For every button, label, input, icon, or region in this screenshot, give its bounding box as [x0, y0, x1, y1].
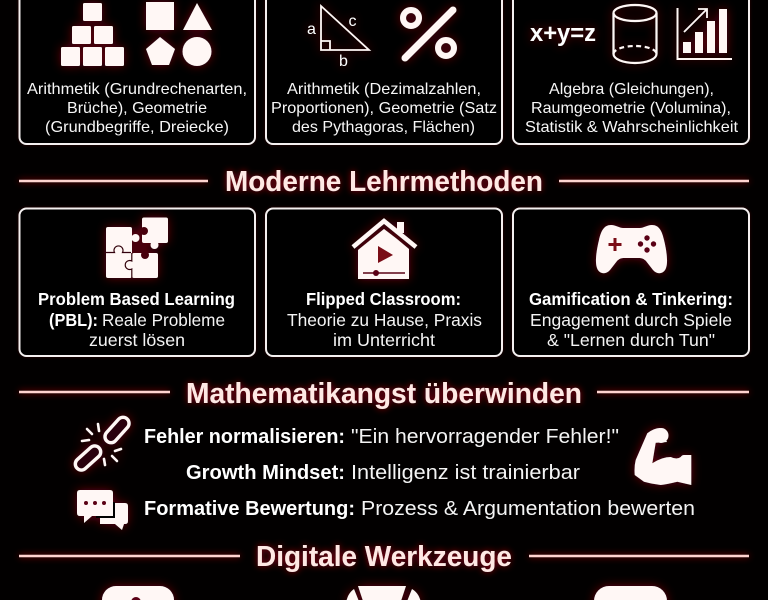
heading: Digitale Werkzeuge: Digitale Werkzeuge: [256, 541, 512, 573]
panel: secondary school topics: [513, 0, 749, 144]
text: Gamification: & "Lernen durch Tun": [547, 330, 715, 350]
panel: Gamification and Tinkering: [513, 208, 749, 356]
text: secondary topics: Algebra (Gleichungen),: [549, 81, 714, 98]
text: Flipped Classroom: Flipped Classroom:: [306, 289, 461, 309]
text: middle school topics: des Pythagoras, Flächen): [292, 119, 475, 136]
text: Formative Bewertung: Prozess & Argumentation bewerten: [361, 497, 695, 520]
text: Growth Mindset: [186, 461, 580, 484]
icon: digital tool right: [594, 586, 667, 600]
icon: puzzle: [106, 218, 168, 278]
icon: house with video: [353, 221, 416, 279]
icon: stacked blocks: [61, 3, 124, 66]
text: Flipped Classroom: Theorie zu Hause, Praxis: [287, 310, 482, 330]
panel: middle school topics: [266, 0, 502, 144]
text: Fehler normalisieren: [144, 425, 619, 448]
text: primary topics: Brüche), Geometrie: [67, 100, 207, 117]
heading: Moderne Lehrmethoden: Moderne Lehrmethoden: [225, 166, 543, 198]
text: primary topics: Arithmetik (Grundrechenarten,: [27, 81, 247, 98]
panel: Flipped Classroom: [266, 208, 502, 356]
text: Formative Bewertung: Formative Bewertung:: [144, 497, 355, 520]
text: Gamification: Engagement durch Spiele: [530, 310, 732, 330]
icon: growth chart: [678, 8, 732, 59]
icon: right triangle: c: [348, 13, 356, 30]
icon: digital tool left: [102, 586, 174, 600]
icon: right triangle: a: [307, 21, 316, 38]
icon: percent sign: [403, 10, 454, 58]
text: primary topics: [27, 81, 247, 136]
icon: right triangle: [307, 6, 369, 70]
text: Growth Mindset: Intelligenz ist trainierbar: [351, 461, 580, 484]
icon: basic shapes: [146, 2, 212, 66]
text: Formative Bewertung: [144, 497, 695, 520]
text: Gamification: Gamification & Tinkering:: [529, 289, 733, 309]
panel: Problem Based Learning: [20, 208, 255, 356]
text: primary topics: (Grundbegriffe, Dreiecke): [45, 119, 229, 136]
icon: digital tool middle: [346, 586, 421, 600]
text: middle school topics: Proportionen), Geometrie (Satz: [271, 100, 497, 117]
icon: flexed arm: [634, 428, 691, 485]
text: PBL: Reale Probleme: [102, 310, 225, 330]
icon: broken chain link: [73, 415, 131, 472]
text: Fehler normalisieren: "Ein hervorragender Fehler!": [351, 425, 619, 448]
text: middle school topics: [271, 81, 497, 136]
heading: Mathematikangst überwinden: Mathematikangst überwinden: [186, 378, 582, 410]
panel: primary school topics: [20, 0, 255, 144]
text: PBL: (PBL):: [49, 310, 98, 330]
icon: game controller: [596, 225, 667, 273]
text: secondary topics: Statistik & Wahrscheinlichkeit: [525, 119, 739, 136]
text: Flipped Classroom: im Unterricht: [333, 330, 435, 350]
text: Flipped Classroom: [287, 289, 482, 350]
icon: right triangle: b: [339, 53, 348, 70]
text: Gamification: [529, 289, 733, 350]
icon: equation: x+y=z: [530, 20, 596, 47]
text: Fehler normalisieren: Fehler normalisieren:: [144, 425, 345, 448]
text: middle school topics: Arithmetik (Dezimalzahlen,: [287, 81, 481, 98]
icon: speech bubbles: [77, 490, 128, 530]
text: secondary topics: [525, 81, 739, 136]
text: Growth Mindset: Growth Mindset:: [186, 461, 345, 484]
text: PBL: [38, 289, 235, 350]
icon: cylinder: [614, 5, 656, 63]
text: PBL: Problem Based Learning: [38, 289, 235, 309]
text: secondary topics: Raumgeometrie (Volumina),: [531, 100, 731, 117]
text: PBL: zuerst lösen: [89, 330, 185, 350]
